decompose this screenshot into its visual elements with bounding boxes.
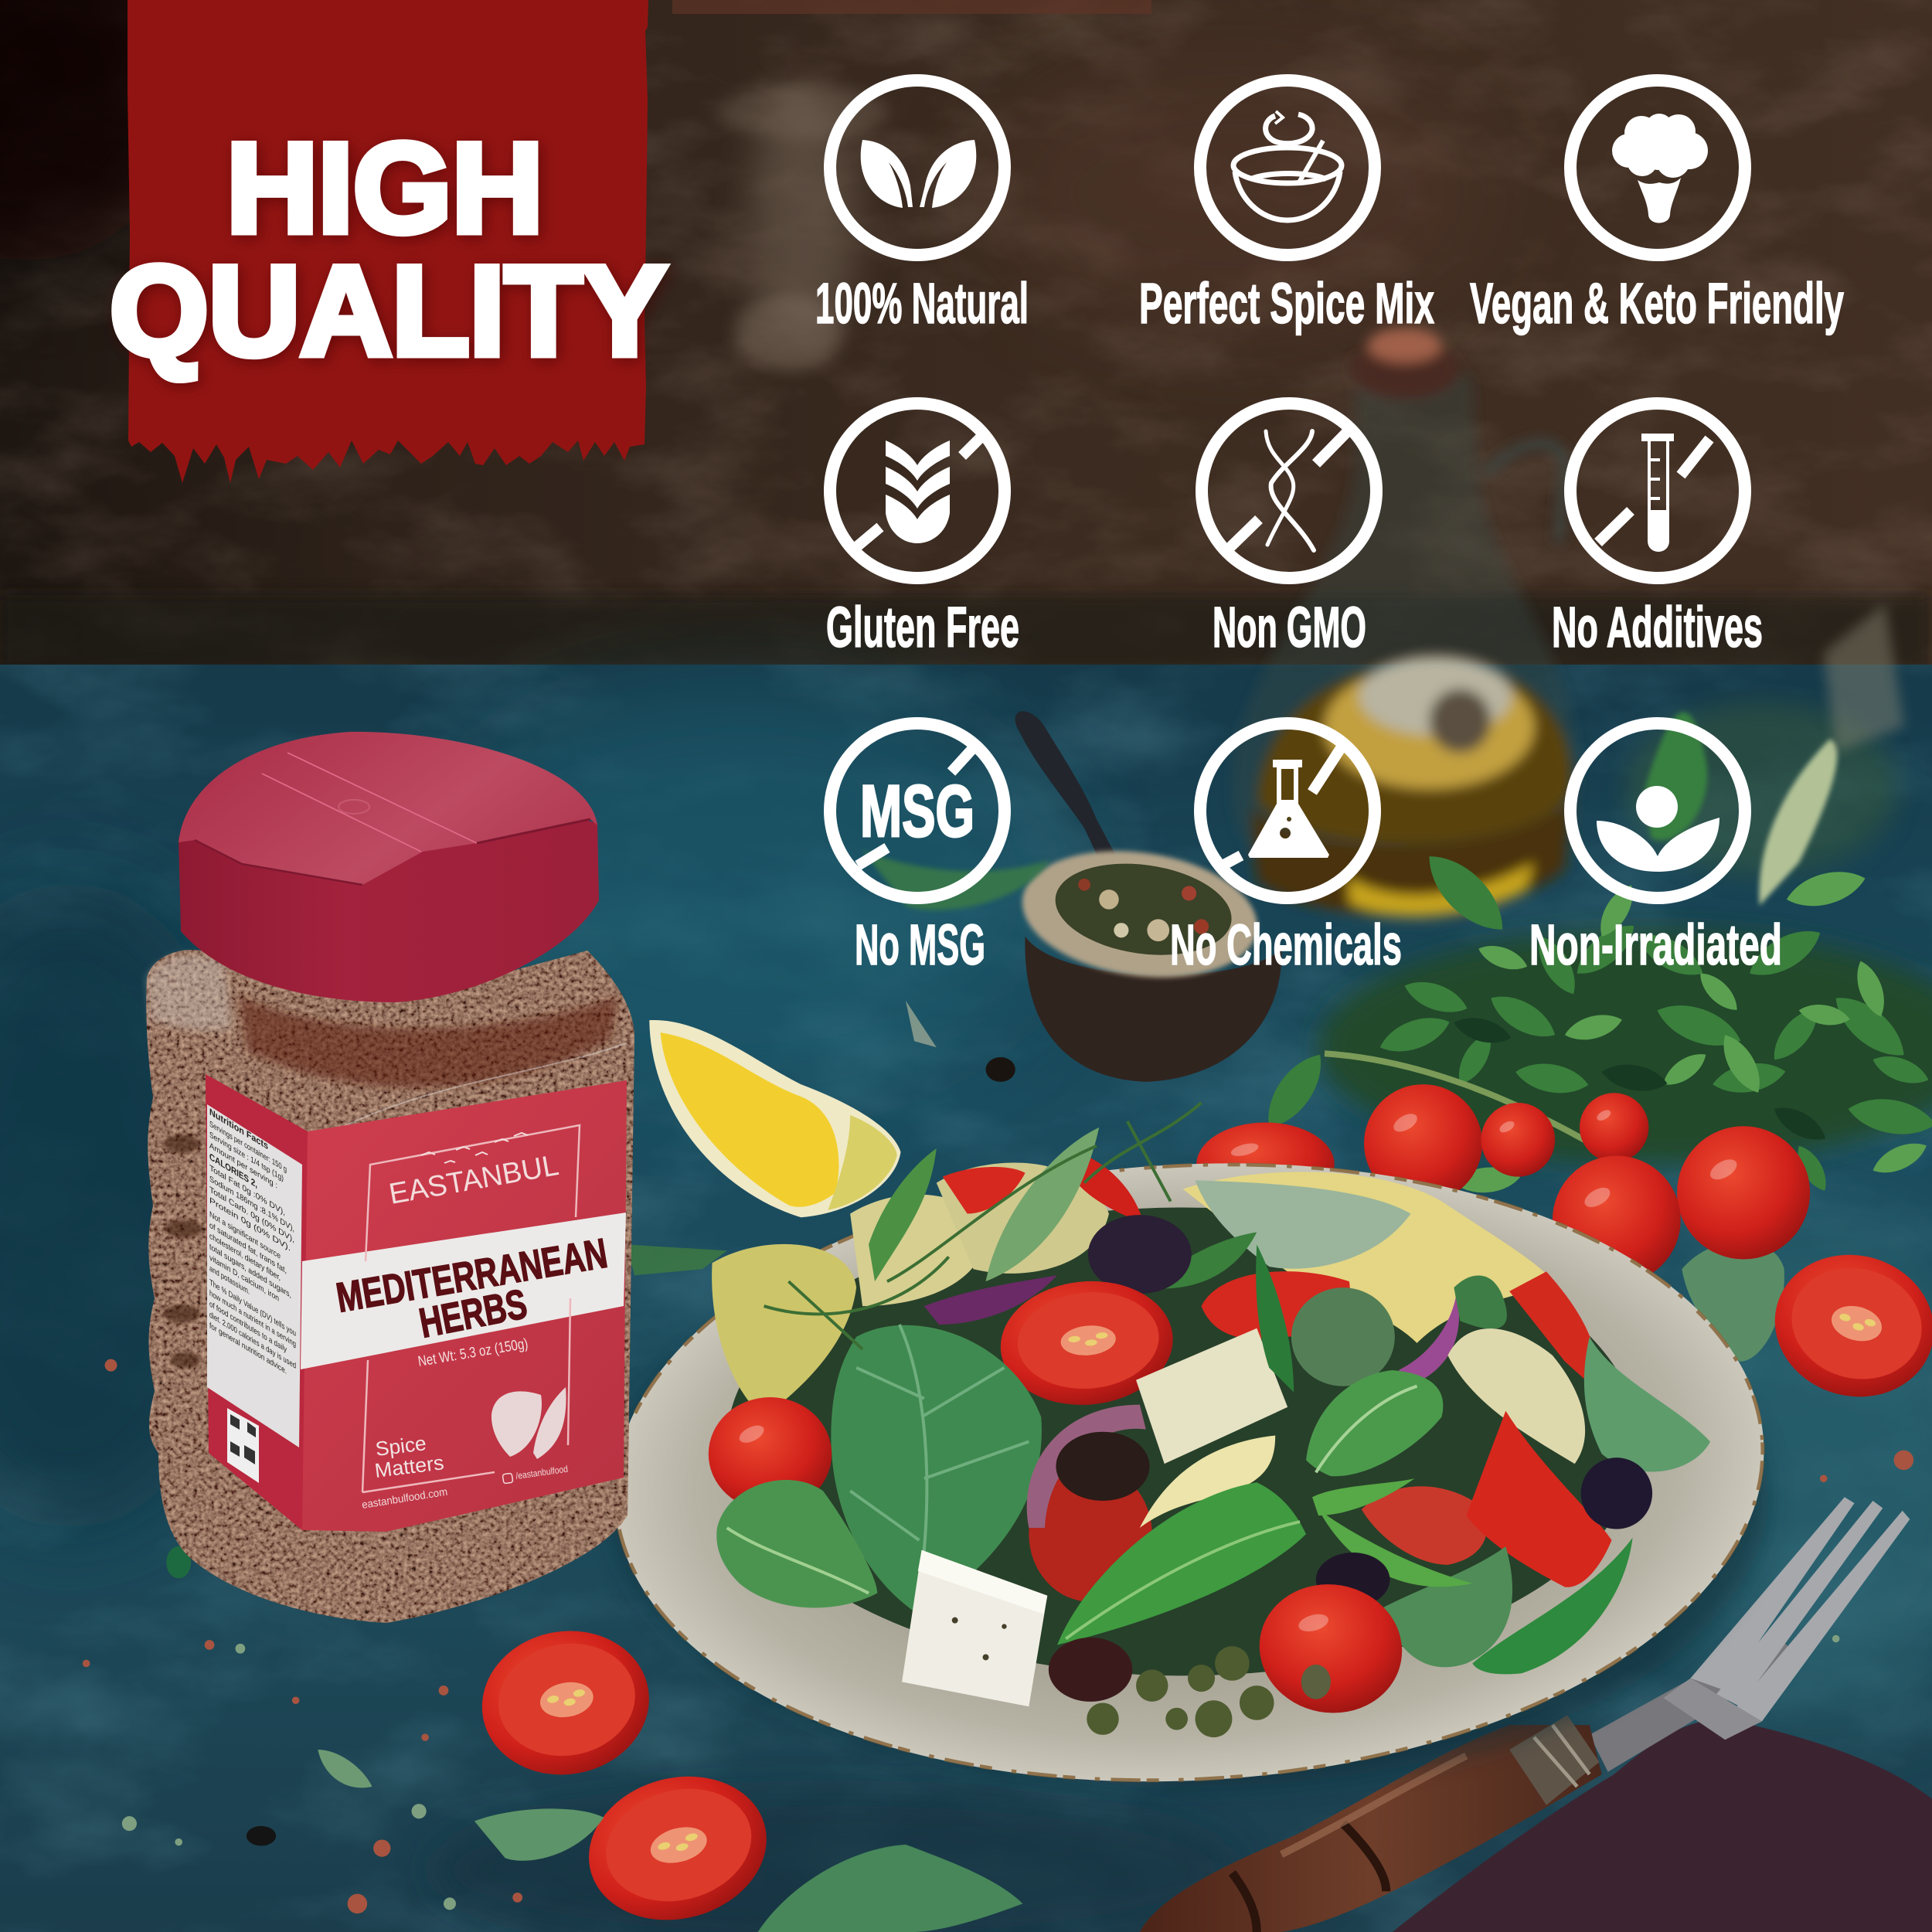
brand name: EASTANBUL — [386, 1149, 561, 1211]
red torn banner — [128, 0, 648, 483]
product name: MEDITERRANEAN — [333, 1230, 611, 1321]
net weight: Net Wt: 5.3 oz (150g) — [417, 1335, 529, 1370]
nutrition panel: vitamin D, calcium, iron — [209, 1253, 279, 1304]
purple cloth — [1393, 1719, 1932, 1932]
capers and olive — [1049, 1638, 1132, 1702]
feature labels: No Additives — [1552, 595, 1763, 659]
nutrition panel: Amount per serving : — [209, 1141, 277, 1191]
headline text — [110, 117, 667, 382]
banner: high quality — [110, 0, 667, 483]
icon: non gmo dna — [1202, 403, 1376, 578]
basil mid — [1306, 1370, 1443, 1476]
nutrition panel: of food contributes to a daily — [209, 1300, 287, 1355]
artichoke left — [712, 1244, 856, 1417]
birds decoration — [421, 1133, 528, 1163]
product jar — [146, 732, 634, 1623]
nutrition panel: Serving size : 1/4 tsp (1g) — [209, 1131, 284, 1183]
tomato half right — [1759, 1237, 1932, 1414]
fork and carved handle — [1140, 1497, 1910, 1932]
herb sprig — [764, 1103, 1202, 1349]
nutrition panel: Sodium 186mg :8.1% DV), — [209, 1175, 294, 1234]
scattered herbs and spices on table — [83, 1001, 1913, 1932]
lemon slice upper right — [1183, 1172, 1555, 1343]
feature labels: Non GMO — [1213, 595, 1366, 659]
nutrition panel: for general nutrition advice. — [209, 1321, 287, 1376]
label front and side — [206, 1074, 627, 1532]
nutrition panel — [207, 1104, 302, 1447]
icon: no msg: MSG — [860, 770, 975, 852]
left tomato — [709, 1397, 832, 1511]
nutrition panel: and potassium. — [209, 1264, 250, 1297]
feature labels: Non-Irradiated — [1529, 913, 1782, 977]
label leaf icon — [492, 1387, 566, 1459]
nutrition panel: Total Carb. 0g (0% DV), — [209, 1185, 294, 1245]
onion and red tomato center — [1029, 1466, 1152, 1602]
tagline: Spice — [374, 1431, 427, 1461]
label frame — [362, 1125, 580, 1492]
jar body — [146, 950, 634, 1623]
spice bowl and spoon — [862, 711, 1281, 1082]
big basil leaf — [831, 1325, 1042, 1614]
icon: no additives test tube — [1570, 403, 1745, 578]
left basil — [716, 1480, 877, 1608]
nutrition panel: of saturated fat, trans fat, — [209, 1221, 287, 1276]
tagline — [373, 1431, 445, 1482]
nutrition panel: total sugars, added sugars, — [209, 1243, 291, 1300]
background: teal table — [0, 665, 1932, 1932]
headline text: QUALITY — [110, 240, 667, 382]
lower right greens — [1383, 1546, 1512, 1667]
tomato top — [943, 1167, 1026, 1213]
icon: 100% natural leaves — [830, 80, 1005, 255]
nutrition panel: Servings per container: 150 g — [209, 1120, 287, 1175]
icon: non-irradiated person leaves — [1570, 723, 1745, 898]
onion right — [1399, 1294, 1459, 1383]
lower tomato — [1249, 1573, 1412, 1724]
green right — [1584, 1337, 1710, 1471]
lemon wedge — [649, 1020, 901, 1217]
olive right — [1581, 1458, 1652, 1529]
feature labels: No Chemicals — [1170, 913, 1402, 977]
instagram handle — [502, 1464, 569, 1484]
salad plate — [598, 1134, 1780, 1810]
fresh herb bunch — [1256, 604, 1932, 1362]
icon: no msg — [830, 723, 1005, 898]
nutrition panel: The % Daily Value (DV) tells you — [209, 1278, 296, 1338]
feta center — [1136, 1328, 1287, 1464]
nutrition panel: Protein 0g (0% DV). — [209, 1196, 291, 1253]
nutrition panel: diet. 2,000 calories a day is used — [209, 1311, 296, 1371]
tomato halves bottom — [471, 1618, 783, 1932]
tomato center — [995, 1274, 1178, 1412]
cherry tomatoes on the vine — [1196, 1084, 1810, 1284]
feature labels: No MSG — [855, 913, 985, 977]
basil leaves center bottom — [1057, 1482, 1306, 1645]
olive oil bottle — [1232, 328, 1578, 924]
icon: no chemicals flask — [1200, 723, 1375, 898]
mid tomato — [1202, 1271, 1350, 1339]
feta right — [1447, 1328, 1585, 1464]
instagram handle: /eastanbulfood — [515, 1464, 569, 1481]
icon: broccoli — [1570, 80, 1745, 255]
tagline: Matters — [373, 1451, 445, 1482]
right tomato slices — [1362, 1486, 1487, 1565]
QR code — [227, 1408, 259, 1483]
jar cap — [179, 732, 599, 1002]
background: rusty wall — [0, 0, 1932, 672]
product name — [333, 1230, 611, 1347]
icon: spice mix bowl — [1200, 80, 1375, 255]
nutrition panel: Total Fat 0g :0% DV), — [209, 1164, 285, 1218]
icon: gluten free wheat — [830, 403, 1005, 578]
feature labels: Gluten Free — [826, 595, 1019, 659]
feature labels: 100% Natural — [815, 271, 1029, 335]
product name: HERBS — [416, 1281, 531, 1347]
feature labels: Perfect Spice Mix — [1139, 271, 1434, 335]
nutrition panel: Not a significant source — [209, 1210, 281, 1261]
feta lower — [902, 1550, 1047, 1706]
nutrition panel: how much a nutrient in a serving — [209, 1289, 296, 1349]
egg piece — [1140, 1435, 1275, 1528]
nutrition panel: Nutrition Facts — [209, 1106, 268, 1151]
nutrition panel: CALORIES 2, — [209, 1151, 257, 1190]
tomato top right wedge — [1509, 1271, 1600, 1393]
salad — [709, 1103, 1710, 1737]
website: eastanbulfood.com — [361, 1485, 448, 1511]
label white band — [301, 1213, 626, 1369]
nutrition panel: cholesterol, dietary fiber, — [209, 1232, 281, 1283]
feature labels — [815, 271, 1844, 977]
headline text: HIGH — [226, 117, 543, 259]
green chunk — [1291, 1287, 1395, 1386]
